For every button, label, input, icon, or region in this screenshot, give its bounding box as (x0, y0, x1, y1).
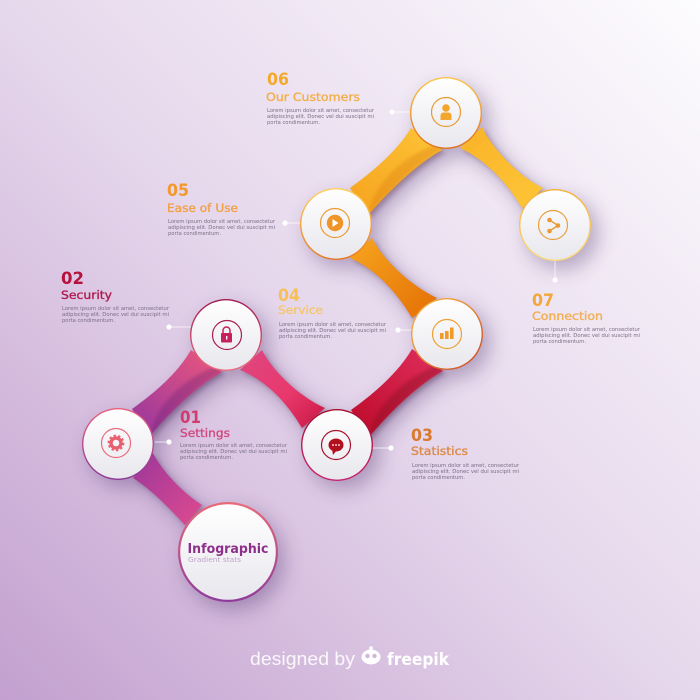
node 03 (301, 409, 394, 481)
node 04 (395, 298, 483, 370)
connector: 04 to 05 (350, 238, 437, 318)
center subtitle: Gradient stats (188, 556, 241, 564)
node 07 (519, 189, 591, 283)
text block 03: Lorem ipsum dolor sit amet, consectetur (412, 463, 520, 469)
node 05 (282, 188, 372, 260)
icon: chat bubble (322, 430, 350, 460)
text block 03: Statistics (411, 444, 468, 458)
icon: gear (102, 428, 130, 458)
text block 07: Connection (532, 309, 603, 323)
text block 01: porta condimentum. (180, 455, 233, 461)
text block 04: porta condimentum. (279, 334, 332, 340)
text block 03: porta condimentum. (412, 475, 465, 481)
icon: play (320, 208, 350, 238)
text block 07: adipiscing elit. Donec vel dui suscipit mi (533, 333, 640, 339)
text block 07: Lorem ipsum dolor sit amet, consectetur (533, 327, 641, 333)
connector: 06 to 07 (460, 127, 543, 208)
text block 06: Our Customers (266, 90, 360, 104)
text block 03: adipiscing elit. Donec vel dui suscipit mi (412, 469, 519, 475)
text block 04 (278, 286, 387, 340)
text block 04: Service (278, 303, 323, 317)
text block 02: 02 (61, 269, 84, 288)
text block 06: Lorem ipsum dolor sit amet, consectetur (267, 108, 375, 114)
text block 02: Security (61, 288, 112, 302)
text block 05: Lorem ipsum dolor sit amet, consectetur (168, 219, 276, 225)
icon: share (538, 210, 568, 240)
node 01 (82, 408, 172, 480)
text block 02: adipiscing elit. Donec vel dui suscipit mi (62, 312, 169, 318)
text block 05: adipiscing elit. Donec vel dui suscipit mi (168, 225, 275, 231)
center node (178, 502, 278, 602)
center title: Infographic (188, 541, 268, 557)
text block 05 (167, 181, 276, 237)
text block 04: 04 (278, 286, 300, 305)
connector: 02 to 03 (240, 350, 325, 428)
footer credit: designed by (250, 649, 355, 669)
connector: 03 to 04 (351, 349, 443, 437)
text block 06: adipiscing elit. Donec vel dui suscipit mi (267, 114, 374, 120)
text block 01 (180, 408, 288, 461)
text block 01: 01 (180, 408, 201, 427)
node 02 (166, 299, 262, 371)
text block 02: porta condimentum. (62, 318, 115, 324)
text block 02: Lorem ipsum dolor sit amet, consectetur (62, 306, 170, 312)
tight shadows along connector edges (135, 130, 546, 528)
icon: lock (212, 320, 242, 350)
footer credit: freepik (387, 650, 450, 670)
text block 03: 03 (411, 426, 433, 445)
text block 07: 07 (532, 291, 554, 310)
text block 04: Lorem ipsum dolor sit amet, consectetur (279, 322, 387, 328)
text block 01: Settings (180, 426, 230, 440)
text block 05: 05 (167, 181, 189, 200)
text block 04: adipiscing elit. Donec vel dui suscipit mi (279, 328, 386, 334)
node 06 (389, 77, 482, 149)
connector: 01 to 02 (132, 350, 222, 436)
text block 06 (266, 70, 375, 126)
soft shadows under nodes and connectors (89, 85, 598, 610)
text block 06: 06 (267, 70, 289, 89)
text block 05: porta condimentum. (168, 231, 221, 237)
icon: bar chart (432, 320, 462, 348)
text block 07 (532, 291, 641, 345)
text block 02 (61, 269, 170, 324)
footer credit (250, 646, 450, 670)
icon: person (432, 98, 460, 126)
text block 01: Lorem ipsum dolor sit amet, consectetur (180, 443, 288, 449)
text block 07: porta condimentum. (533, 339, 586, 345)
connector: 05 to 06 (350, 128, 442, 215)
icon: freepik logo (362, 646, 380, 664)
text block 06: porta condimentum. (267, 120, 320, 126)
text block 03 (411, 426, 520, 481)
connector: center to 01 (133, 453, 202, 525)
text block 05: Ease of Use (167, 201, 238, 215)
text block 01: adipiscing elit. Donec vel dui suscipit mi (180, 449, 287, 455)
